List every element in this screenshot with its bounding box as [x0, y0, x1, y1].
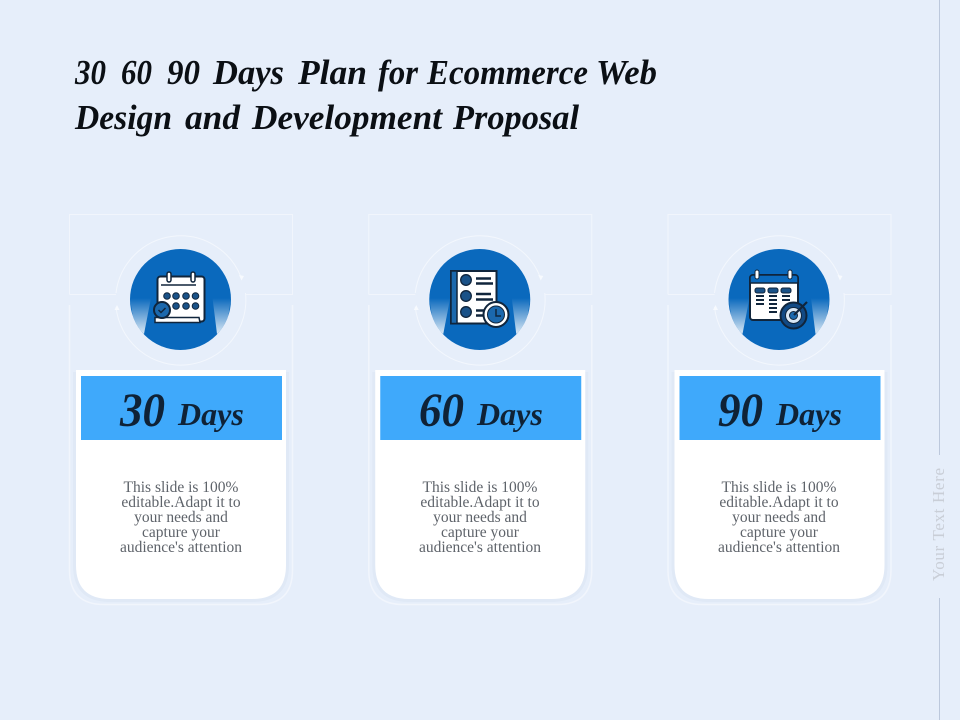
text block: capture your: [740, 524, 819, 541]
heading: 90 Days: [718, 384, 842, 437]
text block: This slide is 100%: [124, 479, 239, 496]
panel: 90 days: [668, 214, 891, 604]
text block: audience's attention: [718, 539, 840, 556]
heading: 30 Days: [119, 384, 244, 437]
text block: your needs and: [732, 509, 826, 526]
title: 30: [74, 53, 106, 92]
title: and: [185, 98, 241, 137]
text block: [120, 479, 242, 556]
text block: your needs and: [134, 509, 228, 526]
heading: 90 Days: 90: [718, 384, 763, 437]
title: [74, 53, 657, 137]
text block: capture your: [142, 524, 221, 541]
heading: 60 Days: 60: [419, 384, 464, 437]
text block: editable.Adapt it to: [719, 494, 839, 511]
icon: calendar with check: [154, 272, 204, 322]
heading: 60 Days: Days: [476, 396, 543, 432]
text block: editable.Adapt it to: [420, 494, 540, 511]
text block: [718, 479, 840, 556]
icon: calendar with target: [750, 270, 807, 328]
text block: audience's attention: [419, 539, 541, 556]
text block: your needs and: [433, 509, 527, 526]
title: Ecommerce: [426, 53, 588, 92]
title: Development: [251, 98, 443, 137]
side text: Your Text Here: [929, 468, 948, 581]
heading: 30 Days: Days: [177, 396, 244, 432]
text block: This slide is 100%: [722, 479, 837, 496]
title: Design: [74, 98, 172, 137]
title: 90: [167, 53, 200, 92]
title: Days: [212, 53, 284, 92]
text block: editable.Adapt it to: [121, 494, 241, 511]
title: Web: [596, 53, 657, 92]
title: Plan: [297, 53, 367, 92]
panel: 60 days: [369, 214, 592, 604]
text block: audience's attention: [120, 539, 242, 556]
title: 60: [121, 53, 152, 92]
text block: [419, 479, 541, 556]
heading: 30 Days: 30: [119, 384, 165, 437]
text block: capture your: [441, 524, 520, 541]
title: Proposal: [452, 98, 579, 137]
heading: 90 Days: Days: [775, 396, 842, 432]
heading: 60 Days: [419, 384, 543, 437]
text block: This slide is 100%: [423, 479, 538, 496]
panel: 30 days: [70, 214, 292, 604]
icon: checklist with clock: [451, 271, 508, 327]
title: for: [378, 53, 418, 92]
